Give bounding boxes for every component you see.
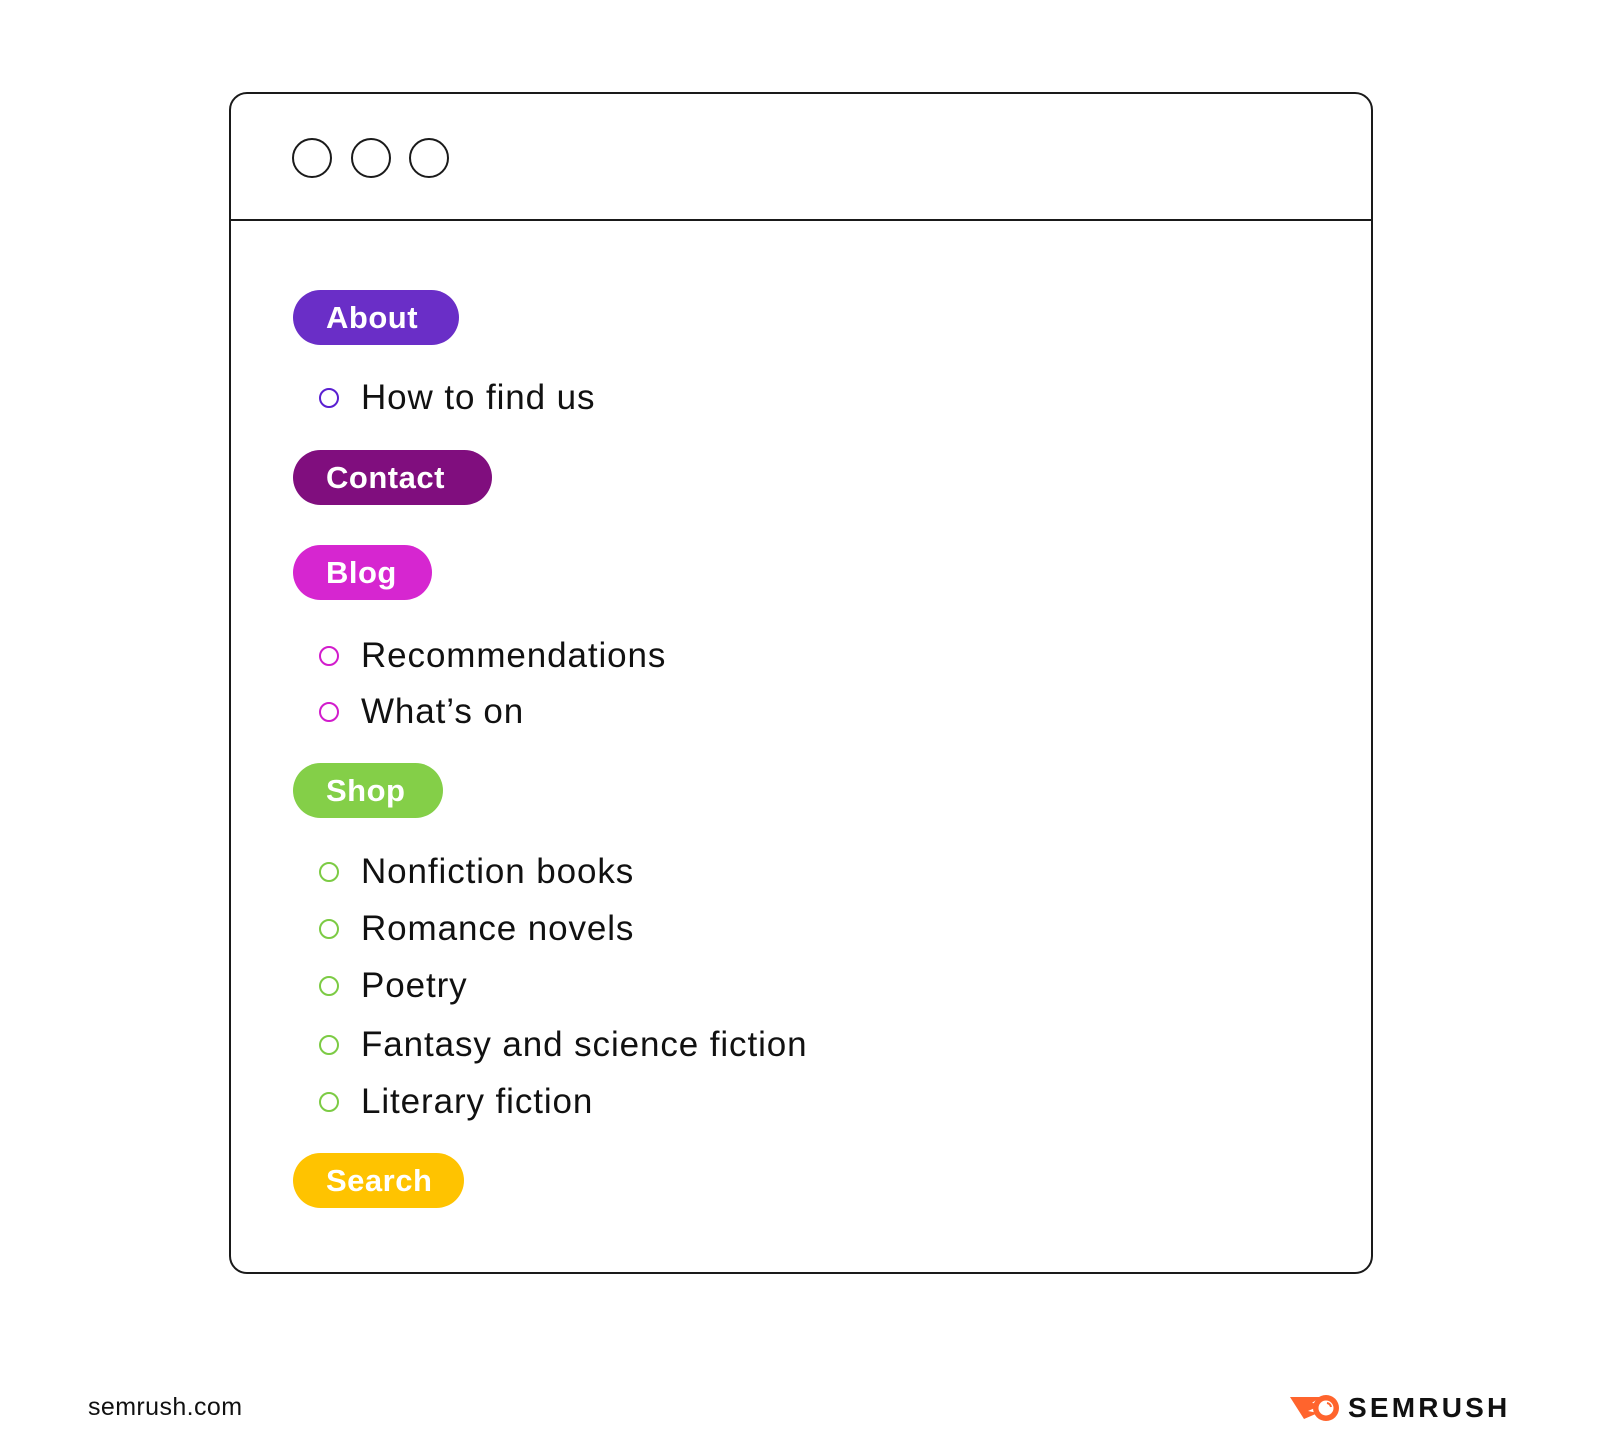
text: Literary fiction — [361, 1082, 593, 1121]
item: Fantasy and science fiction — [319, 1025, 807, 1064]
pill: Contact: Contact — [326, 460, 445, 495]
item: What's on — [319, 692, 524, 731]
pill: Blog: Blog — [326, 555, 397, 590]
text: Poetry — [361, 966, 468, 1005]
text: Fantasy and science fiction — [361, 1025, 807, 1064]
text: What’s on — [361, 692, 524, 731]
pill: Search: Search — [326, 1163, 432, 1198]
panel: browser window — [229, 92, 1373, 1274]
item: Literary fiction — [319, 1082, 593, 1121]
item: Romance novels — [319, 909, 634, 948]
text: Nonfiction books — [361, 852, 634, 891]
pill: Contact — [293, 450, 492, 505]
pill: About — [293, 290, 459, 345]
pill: Shop: Shop — [326, 773, 406, 808]
icon: window dots — [292, 138, 449, 178]
pill: Search — [293, 1153, 464, 1208]
item: Recommendations — [319, 636, 666, 675]
item: How to find us — [319, 378, 595, 417]
footer: semrush.com: semrush.com — [88, 1393, 242, 1421]
logo: Semrush: SEMRUSH — [1348, 1392, 1510, 1423]
pill: Shop — [293, 763, 443, 818]
text: How to find us — [361, 378, 595, 417]
pill: About: About — [326, 300, 418, 335]
text: Romance novels — [361, 909, 634, 948]
item: Nonfiction books — [319, 852, 634, 891]
item: Poetry — [319, 966, 468, 1005]
text: Recommendations — [361, 636, 666, 675]
pill: Blog — [293, 545, 432, 600]
